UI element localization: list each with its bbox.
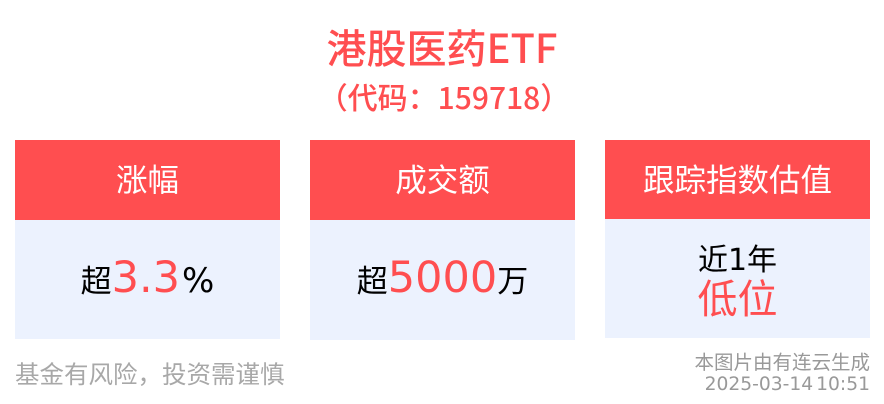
panel body: price change xyxy=(15,220,280,339)
panel heading: price change xyxy=(15,140,280,220)
panel heading: tracked index valuation: 跟踪指数估值 xyxy=(643,155,832,201)
generation credit and timestamp xyxy=(694,351,870,395)
panel: price change xyxy=(15,140,280,339)
panel heading: price change: 涨幅 xyxy=(116,155,179,201)
panel: tracked index valuation xyxy=(605,140,870,338)
panel heading: turnover: 成交额 xyxy=(395,155,490,201)
panel: turnover xyxy=(310,140,575,340)
title: 港股医药ETF xyxy=(326,17,558,75)
generation credit and timestamp: 2025-03-14 10:51 xyxy=(705,374,870,395)
value: one-year period: 近1年 xyxy=(698,243,777,278)
panel body: turnover xyxy=(310,220,575,340)
fund code subtitle: （代码：159718） xyxy=(318,74,570,118)
generation credit and timestamp: 本图片由有连云生成 xyxy=(694,351,870,374)
value: low level: 低位 xyxy=(698,277,778,323)
panel heading: tracked index valuation xyxy=(605,140,870,219)
panel body: tracked index valuation xyxy=(605,219,870,338)
risk disclaimer: 基金有风险，投资需谨慎 xyxy=(15,356,284,391)
value: over 50 million: 超5000万 xyxy=(357,253,528,303)
value: over 3.3 percent: 超3.3% xyxy=(81,253,214,303)
panel heading: turnover xyxy=(310,140,575,220)
